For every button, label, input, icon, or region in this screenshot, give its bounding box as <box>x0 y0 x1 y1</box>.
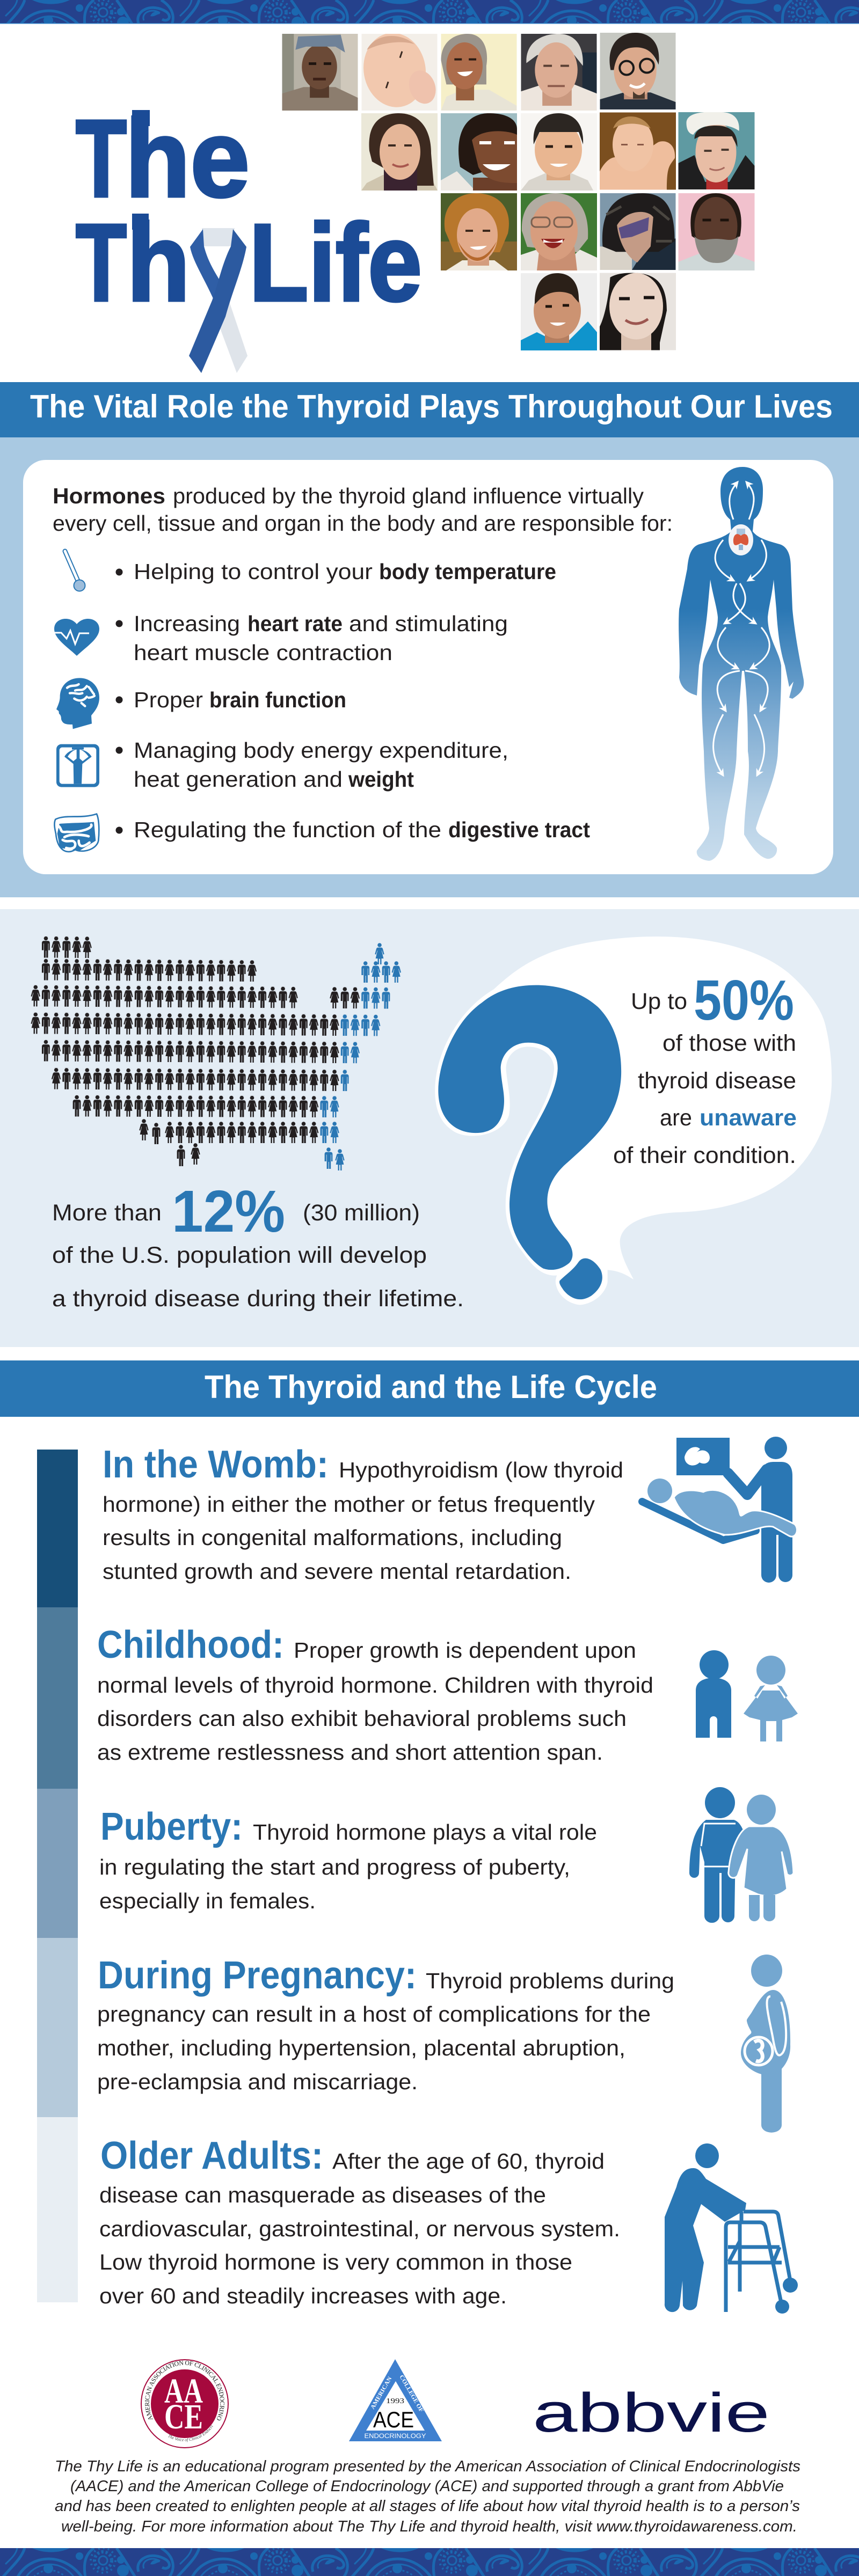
section: in the womb: Hypothyroidism (low thyroid <box>339 1458 623 1482</box>
bullet: heart rate: heart muscle contraction <box>134 640 392 665</box>
photo: soldier <box>282 34 358 111</box>
footer text <box>55 2458 800 2535</box>
top paisley band <box>0 0 859 24</box>
stat: 50 percent: are <box>660 1105 692 1131</box>
panel: hormones <box>0 437 859 897</box>
arrows on body <box>714 482 769 775</box>
photo: smiling black woman <box>441 113 517 191</box>
white card <box>23 460 833 874</box>
bullet: body temperature: Helping to control your <box>134 559 373 584</box>
bullet: weight: weight <box>348 767 414 792</box>
section: childhood <box>97 1623 653 1765</box>
photo: teen in white cap <box>679 112 755 189</box>
section: childhood: disorders can also exhibit behavioral problems such <box>97 1706 627 1731</box>
heading band: life cycle <box>0 1360 859 1417</box>
section: during pregnancy: mother, including hypertension, placental abruption, <box>97 2036 625 2060</box>
photo: asian woman <box>600 273 676 350</box>
logo word: Thy Life <box>76 201 422 324</box>
intro text: Hormones <box>53 484 165 508</box>
bullet: weight: Managing body energy expenditure, <box>134 738 508 763</box>
logo word: The: T <box>76 97 127 220</box>
heading band: vital role <box>0 382 859 437</box>
section: childhood: Proper growth is dependent upon <box>294 1638 636 1663</box>
stat: 50 percent: 50% <box>694 969 794 1032</box>
bullet: heart rate: and stimulating <box>349 611 508 636</box>
section: puberty: in regulating the start and progress of puberty, <box>99 1855 570 1879</box>
bullet: heart rate: Increasing <box>134 611 240 636</box>
section: in the womb: stunted growth and severe mental retardation. <box>103 1559 571 1584</box>
photo: boy in blue shirt <box>521 273 597 350</box>
section: older adults: Older Adults: <box>100 2134 323 2177</box>
logo: AACE seal: CE <box>164 2397 203 2436</box>
logo: abbvie: abbvie <box>533 2382 770 2443</box>
bullet: brain function: Proper <box>134 687 203 712</box>
logo: ACE triangle: ENDOCRINOLOGY <box>364 2432 426 2440</box>
footer text: and has been created to enlighten people at all stages of life about how vital thyroid health is to a person’s <box>55 2498 800 2515</box>
icon: heart <box>54 619 99 656</box>
panel: population statistics <box>0 909 859 1347</box>
section: older adults: After the age of 60, thyroid <box>332 2149 605 2174</box>
stat: 50 percent: unaware <box>700 1105 797 1131</box>
bullet: digestive tract: Regulating the function of the <box>134 817 441 842</box>
bullet: heart rate: heart rate <box>247 611 343 636</box>
section: puberty: Thyroid hormone plays a vital role <box>253 1820 597 1845</box>
section: in the womb: results in congenital malformations, including <box>103 1525 562 1550</box>
section: during pregnancy <box>97 1954 674 2094</box>
stat: 12 percent <box>52 1179 464 1312</box>
section: older adults: disease can masquerade as diseases of the <box>99 2183 546 2207</box>
intro text <box>53 484 673 536</box>
section: older adults <box>99 2134 620 2308</box>
chart: U.S. map of people <box>30 936 402 1170</box>
section: during pregnancy: Thyroid problems during <box>426 1968 674 1993</box>
logo: AACE seal: The Voice of Clinical Endocrinology <box>168 2425 213 2442</box>
intro text: every cell, tissue and organ in the body and are responsible for: <box>53 511 673 536</box>
section: childhood: normal levels of thyroid hormone. Children with thyroid <box>97 1673 653 1697</box>
icon: intestines <box>54 814 99 852</box>
speech bubble with question mark <box>435 936 832 1305</box>
bullet: body temperature <box>116 559 556 584</box>
section: childhood: as extreme restlessness and short attention span. <box>97 1740 603 1765</box>
section: puberty: especially in females. <box>99 1889 316 1913</box>
logo word: Thy Life: Life <box>249 201 422 324</box>
stat: 12 percent: (30 million) <box>303 1200 420 1226</box>
logo: ACE triangle: COLLEGE OF <box>398 2374 425 2413</box>
section: in the womb <box>103 1443 623 1584</box>
stat: 50 percent: of their condition. <box>613 1143 796 1168</box>
logo word: Thy Life: h <box>127 201 190 324</box>
photo: rocker with sunglasses <box>600 193 675 270</box>
section: older adults: cardiovascular, gastrointestinal, or nervous system. <box>99 2216 620 2241</box>
photo: young boy <box>521 113 597 191</box>
photo: man with glasses <box>600 33 675 109</box>
section: during pregnancy: pregnancy can result in a host of complications for the <box>97 2002 651 2026</box>
stat: 12 percent: More than <box>52 1200 162 1226</box>
logo: ACE triangle: ACE <box>373 2407 414 2432</box>
icon: boy and girl <box>696 1650 798 1741</box>
icon: teenagers <box>689 1787 794 1923</box>
logo: ACE triangle <box>349 2359 442 2441</box>
photo grid of faces <box>282 28 755 350</box>
bullet: weight: heat generation and <box>134 767 343 792</box>
stat: 50 percent: of those with <box>663 1030 796 1056</box>
section: puberty <box>99 1805 597 1913</box>
icon: head with brain <box>56 678 99 729</box>
logo: The Thy Life <box>76 97 422 373</box>
bullet: digestive tract: digestive tract <box>448 817 590 842</box>
human body figure <box>679 467 804 861</box>
stat: 12 percent: of the U.S. population will develop <box>52 1242 427 1268</box>
photo: older man <box>521 34 597 111</box>
icon: weight scale <box>56 744 99 787</box>
logo: AACE seal: AMERICAN ASSOCIATION OF CLINICAL ENDOCRINOLOGISTS <box>145 2360 224 2420</box>
footer text: well-being. For more information about The Thy Life and thyroid health, visit www.thyroidawareness.com. <box>61 2518 797 2535</box>
stat: 50 percent <box>613 969 797 1168</box>
bullet: heart rate <box>116 611 508 665</box>
intro text: produced by the thyroid gland influence virtually <box>173 484 644 508</box>
bullet: brain function: brain function <box>209 687 346 712</box>
bullet: digestive tract <box>116 817 590 842</box>
thyroid gland <box>729 524 753 555</box>
stat: 12 percent: 12% <box>172 1179 285 1245</box>
logo word: The: he <box>125 97 250 220</box>
section: older adults: Low thyroid hormone is very common in those <box>99 2250 572 2274</box>
bullet: weight <box>116 738 508 792</box>
photo: curly haired man <box>441 193 517 270</box>
bottom paisley band <box>0 2548 859 2576</box>
logo: AACE seal <box>141 2359 229 2448</box>
section: childhood: Childhood: <box>97 1623 284 1666</box>
stat: 50 percent: Up to <box>631 989 687 1014</box>
photo: newborn <box>600 113 676 190</box>
logo word: Thy Life: T <box>76 201 127 324</box>
footer text: The Thy Life is an educational program presented by the American Association of Clinical Endocrinologists <box>55 2458 800 2475</box>
icon: older adult with walker <box>665 2143 798 2314</box>
life cycle timeline bar <box>37 1450 78 2302</box>
logo: AACE seal: AA <box>164 2372 203 2411</box>
section: older adults: over 60 and steadily increases with age. <box>99 2284 507 2308</box>
section: during pregnancy: During Pregnancy: <box>98 1954 417 1997</box>
stat: 50 percent: thyroid disease <box>638 1068 796 1094</box>
bullet: brain function <box>116 687 346 712</box>
logo: ACE triangle: 1993 <box>386 2397 404 2405</box>
photo: baby <box>362 34 437 111</box>
icon: ultrasound scene <box>642 1437 797 1583</box>
photo: older woman with glasses <box>521 193 597 270</box>
photo: older black man <box>679 193 755 270</box>
footer text: (AACE) and the American College of Endocrinology (ACE) and supported through a grant from AbbVie <box>70 2478 784 2495</box>
photo: older woman smiling <box>441 34 516 111</box>
section: in the womb: hormone) in either the mother or fetus frequently <box>103 1492 595 1517</box>
icon: pregnant woman <box>741 1955 790 2133</box>
icon: awareness ribbon <box>189 228 247 373</box>
heading band: life cycle: The Thyroid and the Life Cycle <box>205 1369 657 1405</box>
logo: ACE triangle: AMERICAN <box>369 2376 394 2411</box>
section: puberty: Puberty: <box>100 1805 243 1848</box>
section: in the womb: In the Womb: <box>103 1443 329 1486</box>
heading band: vital role: The Vital Role the Thyroid Plays Throughout Our Lives <box>30 389 833 425</box>
stat: 12 percent: a thyroid disease during their lifetime. <box>52 1286 464 1312</box>
photo: woman with dark hair <box>361 113 438 191</box>
icon: thermometer <box>65 551 85 591</box>
bullet: body temperature: body temperature <box>379 559 556 584</box>
section: during pregnancy: pre-eclampsia and miscarriage. <box>97 2069 418 2094</box>
